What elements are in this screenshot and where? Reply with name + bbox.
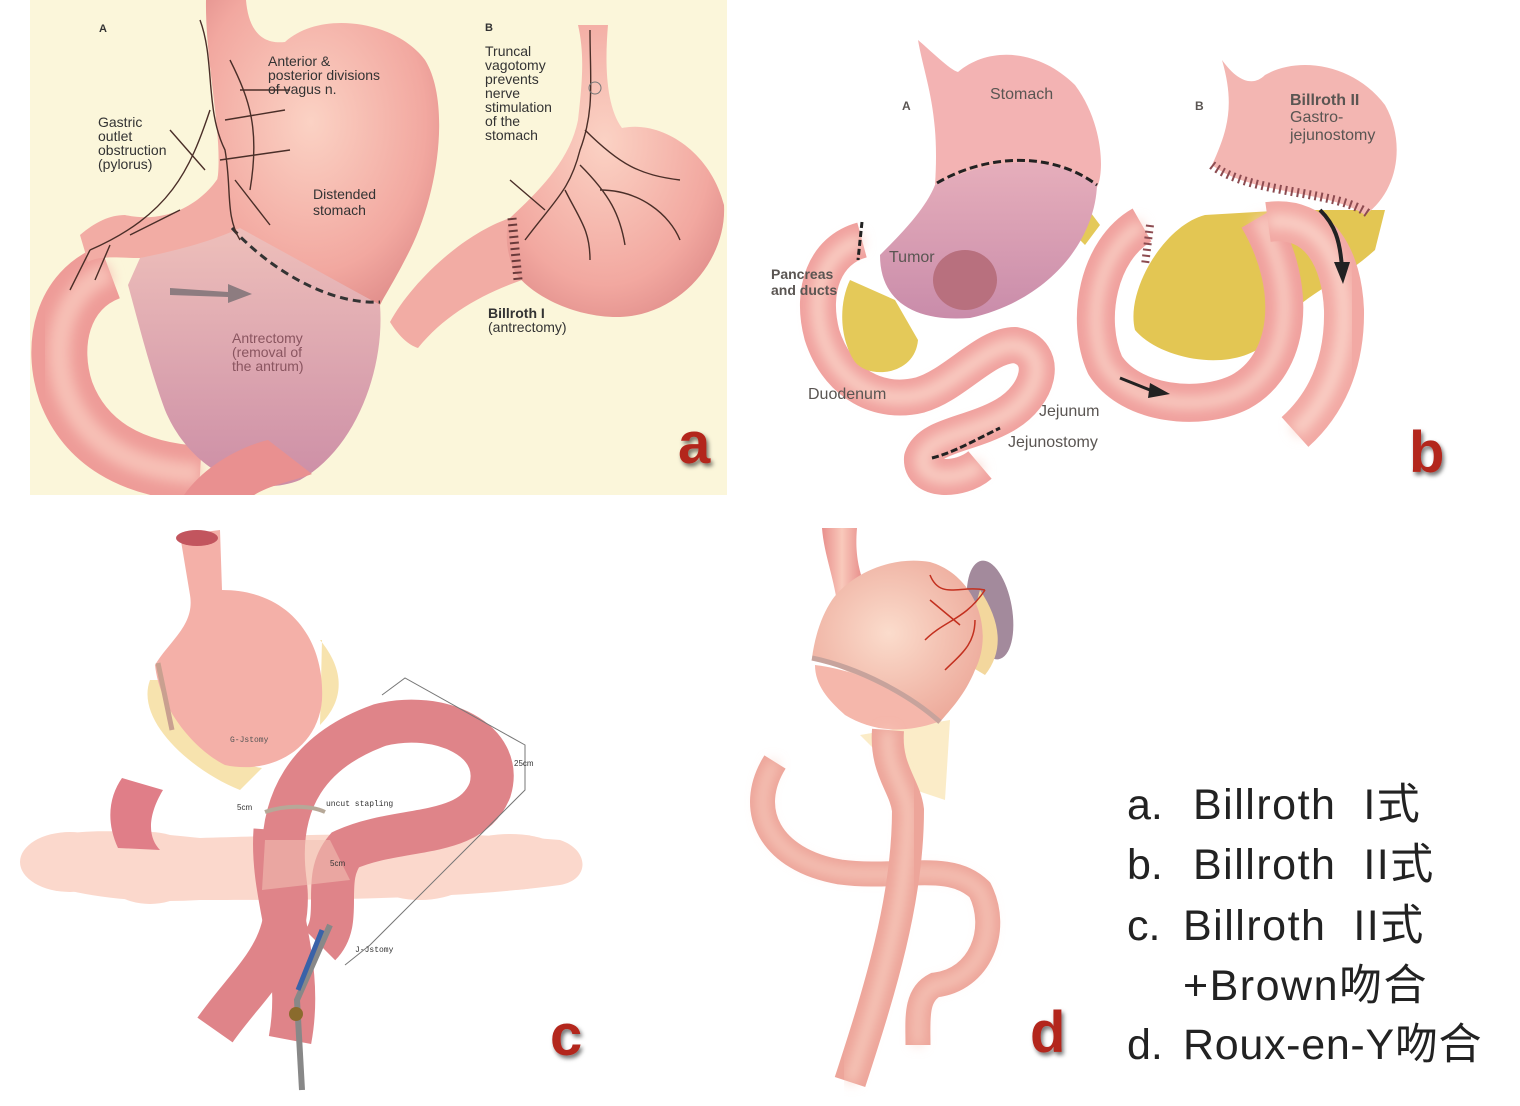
labels panel B: of the: [485, 113, 520, 129]
labels panel B: Truncal: [485, 43, 531, 59]
labels panel a: obstruction: [98, 142, 166, 158]
legend: [1127, 781, 1482, 1069]
vagus nerves: [70, 20, 290, 290]
labels panel a: the antrum): [232, 358, 304, 374]
labels panel B: stimulation: [485, 99, 552, 115]
right gastrojejunostomy: Billroth II: [1290, 92, 1359, 109]
labels c: 25cm: [514, 759, 534, 768]
labels panel B: stomach: [485, 127, 538, 143]
antrectomy cut line: [232, 228, 380, 302]
labels panel B: Billroth I: [488, 305, 545, 321]
legend: Billroth II式: [1193, 841, 1435, 889]
letter c: c: [550, 1003, 582, 1068]
legend: a.: [1127, 781, 1163, 829]
labels panel a: Gastric: [98, 114, 142, 130]
labels b left: [771, 86, 1204, 451]
right gastrojejunostomy: Gastro-: [1290, 109, 1343, 126]
labels panel a: stomach: [313, 202, 366, 218]
legend: b.: [1127, 841, 1163, 889]
stapler: [297, 925, 330, 1090]
labels panel B: nerve: [485, 85, 520, 101]
labels panel a: Antrectomy: [232, 330, 303, 346]
measure lines: [345, 678, 525, 965]
legend: d.: [1127, 1021, 1163, 1069]
legend: +Brown吻合: [1183, 962, 1428, 1010]
duodenum tube A: [59, 272, 200, 474]
labels panel B: [485, 22, 567, 335]
panel b: Billroth II illustration: [771, 40, 1444, 485]
labels panel a: (removal of: [232, 344, 302, 360]
labels c: [230, 736, 534, 955]
legend: Billroth I式: [1193, 781, 1421, 829]
letter d: d: [1030, 1000, 1065, 1065]
esophagus and stomach: [147, 530, 339, 790]
right gastrojejunostomy: [1096, 60, 1397, 432]
labels panel a: of vagus n.: [268, 81, 336, 97]
limb: [763, 730, 988, 1082]
letter a: a: [678, 411, 711, 476]
letter b: b: [1409, 420, 1444, 485]
right gastrojejunostomy: jejunostomy: [1289, 127, 1375, 144]
duodenum and jejunum left: [818, 222, 1037, 477]
labels panel a: Anterior &: [268, 53, 331, 69]
legend: Roux-en-Y吻合: [1183, 1021, 1482, 1069]
labels panel a: posterior divisions: [268, 67, 380, 83]
distended stomach A: [80, 0, 439, 498]
stomach with tumor: [880, 40, 1101, 319]
labels b left: Stomach: [990, 86, 1053, 103]
labels panel a: Distended: [313, 186, 376, 202]
gastric pouch: [812, 561, 983, 722]
panel d: Roux-en-Y illustration: [763, 528, 1020, 1082]
legend: c.: [1127, 902, 1160, 950]
labels panel B: (antrectomy): [488, 319, 567, 335]
labels panel a: outlet: [98, 128, 132, 144]
labels panel a: (pylorus): [98, 156, 152, 172]
labels b left: and ducts: [771, 282, 837, 298]
esophagus: [822, 528, 862, 610]
labels c: uncut stapling: [326, 800, 393, 809]
afferent stump: [110, 778, 163, 850]
labels panel a: A: [99, 23, 107, 35]
labels b left: Duodenum: [808, 386, 886, 403]
labels b left: Jejunum: [1039, 403, 1099, 420]
labels c: 5cm: [237, 803, 252, 812]
jejunum loop: [215, 721, 492, 1040]
labels c: G-Jstomy: [230, 736, 269, 745]
pancreas: [20, 831, 582, 904]
labels b left: Jejunostomy: [1008, 434, 1098, 451]
labels panel a: [98, 23, 380, 374]
arrow: [170, 284, 252, 303]
labels b left: A: [902, 99, 911, 113]
pancreas: [842, 280, 918, 372]
labels b left: B: [1195, 99, 1204, 113]
labels panel B: B: [485, 22, 493, 34]
labels panel B: prevents: [485, 71, 539, 87]
panel a: Billroth I illustration: [30, 0, 727, 498]
stomach B Billroth I: [390, 25, 724, 348]
legend: Billroth II式: [1183, 902, 1425, 950]
labels b left: Pancreas: [771, 266, 833, 282]
labels c: J-Jstomy: [355, 946, 394, 955]
panel c: Billroth II + Brown illustration: [20, 530, 582, 1090]
labels c: 5cm: [330, 859, 345, 868]
labels b left: Tumor: [889, 249, 935, 266]
spleen: [960, 557, 1020, 663]
labels panel B: vagotomy: [485, 57, 546, 73]
